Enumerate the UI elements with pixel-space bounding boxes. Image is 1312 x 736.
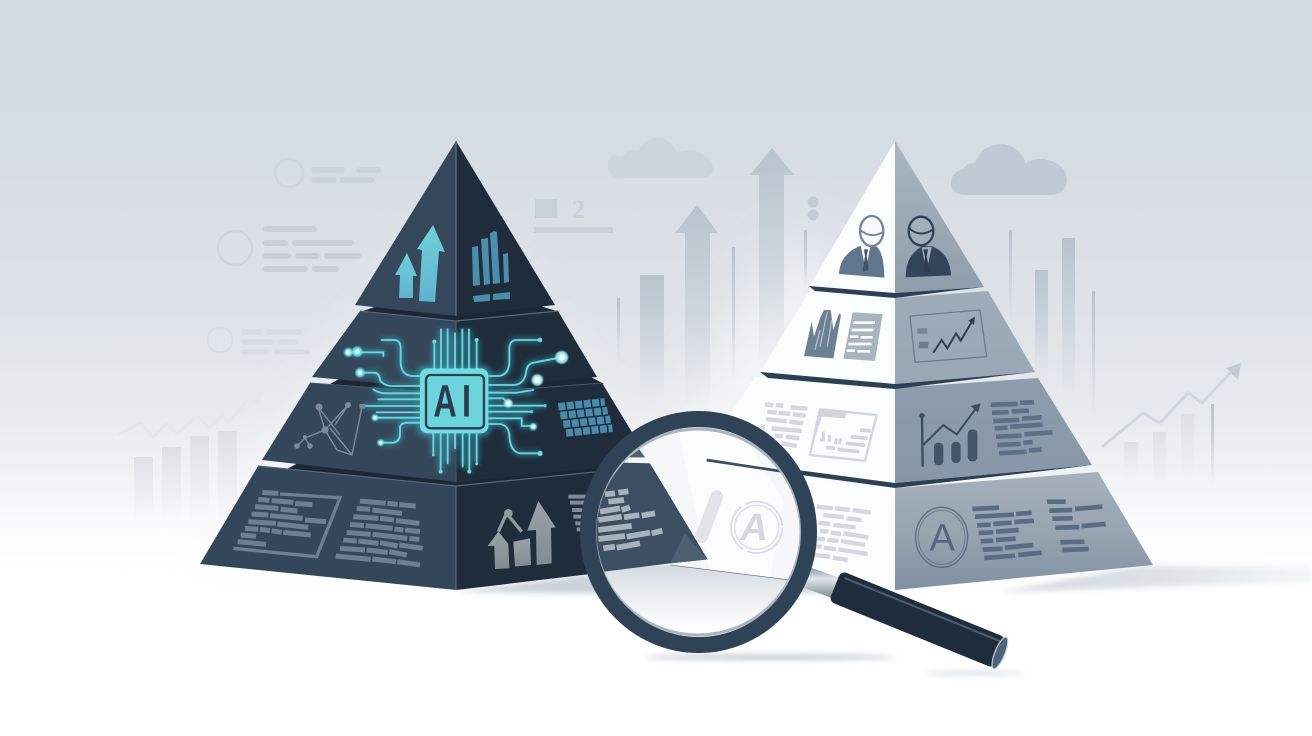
text lines: tier 4 right bbox=[972, 502, 1106, 558]
icon: tier 2 document bbox=[843, 312, 883, 361]
left pyramid tier gaps bbox=[360, 300, 560, 326]
left pyramid tier 2 bbox=[312, 311, 597, 390]
tier 3 and 4 content bbox=[761, 402, 1106, 567]
right pyramid right grey faces bbox=[895, 141, 1153, 590]
AI chip bbox=[420, 368, 488, 433]
decoration: cloud center bbox=[608, 138, 713, 178]
lens inner rim bbox=[595, 429, 801, 635]
lens: floor line bbox=[670, 564, 788, 580]
right pyramid left white faces bbox=[640, 141, 895, 590]
icon: circled A: A bbox=[930, 517, 956, 560]
icon: bar chart bbox=[472, 231, 510, 302]
left pyramid tier 1 bbox=[355, 141, 555, 316]
left pyramid tier 3 bbox=[262, 321, 650, 482]
AI chip circuit bbox=[344, 329, 568, 474]
text lines: tier 3 right bbox=[991, 402, 1052, 453]
left pyramid tier 4 bbox=[200, 466, 708, 590]
icon: data grid bbox=[558, 398, 613, 437]
circuit glow bbox=[348, 329, 562, 472]
icon: tier 3 trend chart bbox=[919, 403, 981, 467]
icon: network graph bbox=[294, 402, 362, 455]
decoration: right rising bars bbox=[1009, 230, 1095, 416]
icon: left businessman bbox=[839, 216, 884, 278]
text lines: left document bbox=[233, 492, 423, 565]
decoration: center rising bars and arrows bbox=[617, 148, 818, 405]
lens: magnified text lines bbox=[598, 491, 662, 548]
circuit traces bbox=[348, 329, 562, 472]
icon: tier 3 folder chart bbox=[810, 409, 877, 461]
circuit end dots bbox=[344, 338, 568, 474]
background decoration: left info rows bbox=[208, 159, 378, 352]
decoration: left bar chart with trend arrow bbox=[118, 390, 264, 522]
background glow around pyramids bbox=[180, 230, 1060, 560]
right pyramid tier grooves bbox=[745, 286, 1092, 488]
lens: light streaks bbox=[677, 413, 783, 580]
lens ring bbox=[588, 419, 809, 645]
decoration: right bar chart with trend arrow bbox=[1102, 363, 1241, 484]
decoration: square and number bbox=[534, 195, 613, 233]
text lines: tier 4 left bbox=[812, 507, 871, 560]
lens: faint bar bbox=[702, 497, 717, 537]
magnifying glass bbox=[580, 410, 1011, 671]
floor shadow: between pyramids bbox=[456, 570, 900, 594]
decoration: top list bbox=[275, 159, 378, 187]
icon: tier 2 bar cluster bbox=[804, 310, 841, 358]
text lines: tier 3 left bbox=[761, 404, 808, 446]
left pyramid: AI bbox=[200, 141, 708, 590]
decoration: middle list bbox=[218, 229, 358, 269]
floor shadow: right of right pyramid bbox=[1000, 566, 1312, 592]
decoration: lower list bbox=[208, 328, 308, 352]
lens contents bbox=[596, 430, 788, 616]
lens: magnified groove line bbox=[706, 458, 780, 472]
AI chip: AI bbox=[433, 378, 476, 427]
lens: magnified floor bbox=[604, 565, 788, 600]
lens: faint circled A bbox=[731, 502, 782, 553]
decoration: cloud right bbox=[951, 144, 1067, 195]
icon: rising arrows bbox=[395, 225, 445, 302]
lens: magnified dark tier bbox=[590, 462, 708, 573]
icon: grey arrows and bar bbox=[488, 497, 587, 569]
right pyramid: human bbox=[640, 141, 1153, 590]
decoration: square and number: 2 bbox=[572, 195, 585, 224]
handle bbox=[829, 570, 1011, 671]
icon: right businessman bbox=[906, 217, 951, 277]
handle neck bbox=[799, 566, 840, 598]
icon: tier 2 trend screen bbox=[910, 310, 987, 362]
icon: circled A bbox=[916, 507, 968, 567]
magnifier floor shadows bbox=[645, 654, 1025, 674]
lens: faint circled A: A bbox=[739, 506, 768, 549]
icons: two businessmen bbox=[804, 216, 987, 362]
